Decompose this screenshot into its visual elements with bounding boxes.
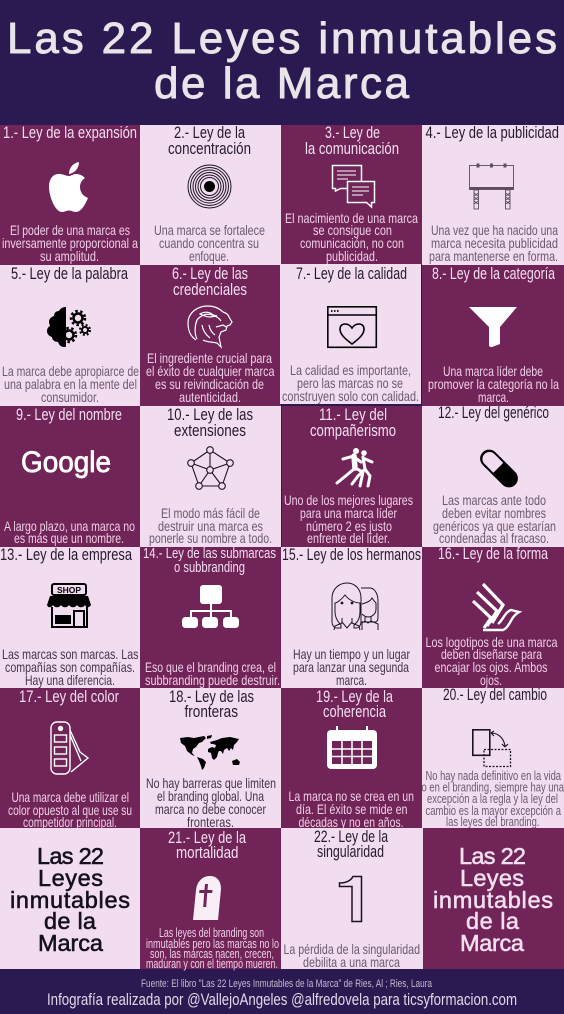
heading: law 22 (314, 828, 389, 861)
heading: law 10: 10.- Ley de las (167, 406, 253, 424)
heading: law 11 (310, 406, 396, 440)
text: law 9: es más que un nombre. (14, 530, 124, 546)
text: law 1 (2, 222, 138, 264)
text: repeated title dark: Las 22 (37, 843, 104, 869)
heading: law 11: 11.- Ley del (319, 406, 387, 424)
icon: apple (49, 162, 88, 212)
text: repeated title light: de la (466, 908, 520, 934)
heading: law 19: 19.- Ley de la (316, 688, 394, 706)
text: law 2: cuando concentra su (159, 235, 259, 251)
text: law 1: su amplitud. (40, 248, 99, 264)
text: repeated title light: Marca (460, 930, 525, 956)
heading: law 22: singularidad (317, 843, 384, 861)
panel: law 17 (0, 688, 140, 830)
icon: funnel (469, 307, 517, 347)
heading: law 11: compañerismo (310, 422, 396, 440)
text: law 11 (284, 492, 413, 546)
text: law 5 (2, 363, 139, 405)
text: repeated title dark: de la (44, 908, 97, 934)
text: law 10: ponerle su nombre a todo. (149, 530, 272, 546)
text: repeated title light: Leyes (460, 865, 524, 891)
text: law 1: inversamente proporcional a (2, 235, 138, 251)
panel: title repeat left (0, 828, 140, 969)
icon: pill (476, 446, 522, 491)
panel: law 2 (140, 124, 281, 265)
text: law 14: subbranding puede destruir. (145, 672, 280, 688)
text: repeated title dark: Leyes (38, 865, 103, 891)
icon: lion (188, 306, 232, 347)
text: law 12 (433, 492, 556, 546)
heading: law 3 (305, 124, 399, 158)
text: law 21: son, las marcas nacen, crecen, (150, 947, 274, 961)
heading: law 2: concentración (168, 140, 251, 158)
heading: law 17: 17.- Ley del color (19, 688, 119, 706)
panel: law 16 (422, 545, 564, 688)
heading: law 6 (172, 265, 248, 299)
text: law 2: enfoque. (189, 248, 229, 264)
panel: law 8 (422, 265, 564, 406)
panel: law 1 (0, 124, 140, 265)
text: law 10: destruir una marca es (158, 518, 263, 534)
text: law 7: La calidad es importante, (290, 362, 411, 378)
heading: law 21 (168, 829, 247, 862)
panel: law 19 (281, 688, 422, 830)
heading: law 14: o subbranding (174, 559, 245, 576)
panel: law 15 (281, 546, 422, 688)
heading: law 19: coherencia (323, 703, 387, 721)
text: law 3: comunicación, no con (300, 235, 404, 251)
heading: law 2 (168, 124, 251, 158)
heading: law 21: 21.- Ley de la (168, 829, 247, 847)
text: law 8 (428, 363, 559, 405)
text: law 15: marca. (336, 672, 367, 688)
text: law 22 (284, 941, 420, 970)
panel: law 22 (281, 828, 423, 970)
text: law 13: Hay una diferencia. (25, 672, 115, 688)
text: law 17: competidor principal. (23, 814, 117, 830)
heading: law 6: credenciales (173, 281, 247, 299)
text: law 21: maduran y con el tiempo mueren. (146, 957, 278, 971)
icon: runners (337, 448, 372, 486)
panel: law 6 (140, 265, 281, 406)
panel: law 4 (422, 124, 564, 265)
text: law 2: Una marca se fortalece (154, 222, 265, 238)
text: law 3: se consigue con (313, 222, 392, 238)
text: law 2 (154, 222, 265, 264)
text: law 18 (146, 775, 276, 830)
text: law 19 (288, 788, 414, 830)
text: repeated title light (433, 843, 553, 956)
text: law 6: es su reivindicación de (155, 376, 264, 392)
text: law 19: La marca no se crea en un (288, 788, 414, 804)
text: law 17 (8, 789, 132, 830)
text: law 3: El nacimiento de una marca (285, 210, 418, 226)
title: de la Marca (154, 59, 410, 108)
panel: law 3 (281, 124, 422, 264)
heading: law 15: 15.- Ley de los hermanos (282, 546, 421, 564)
text: law 22: debilita a una marca (303, 954, 400, 970)
text: law 18: el branding global. Una (157, 788, 264, 804)
icon: number one (340, 876, 362, 922)
text: law 9: A largo plazo, una marca no (4, 518, 135, 534)
panel: law 14 (140, 545, 281, 688)
text: repeated title light: Las 22 (459, 843, 526, 869)
text: law 15: Hay un tiempo y un lugar (293, 646, 410, 662)
text: law 17: color opuesto al que use su (8, 802, 132, 818)
text: law 20 (422, 769, 564, 829)
text: law 21: Las leyes del branding son (159, 926, 264, 940)
icon: siblings (332, 583, 378, 630)
text: repeated title light: inmutables (433, 887, 553, 913)
icon: org chart (182, 585, 239, 628)
text: law 19: décadas y no en años. (298, 814, 404, 830)
text: law 11: Uno de los mejores lugares (284, 492, 413, 508)
text: law 13: Las marcas son marcas. Las (2, 646, 138, 662)
heading: law 2: 2.- Ley de la (174, 124, 246, 142)
text: law 7 (282, 362, 419, 404)
icon: shop: SHOP (57, 586, 82, 595)
panel: law 13 (0, 546, 140, 688)
panel: law 9 (0, 406, 140, 547)
text: law 3 (285, 210, 418, 264)
heading: law 18: 18.- Ley de las (169, 688, 254, 706)
heading: law 5: 5.- Ley de la palabra (11, 265, 129, 283)
heading: law 22: 22.- Ley de la (314, 828, 389, 846)
icon: transform shape (473, 730, 510, 766)
panel: law 10 (140, 406, 281, 547)
icon: network (188, 447, 233, 489)
text: law 18: fronteras. (187, 814, 234, 830)
text: law 5: consumidor. (41, 389, 99, 405)
icon: tombstone (193, 876, 221, 920)
heading: law 6: 6.- Ley de las (172, 265, 248, 283)
text: law 15 (293, 646, 410, 688)
icon: brain with gears (47, 307, 90, 347)
heading: law 14: 14.- Ley de las submarcas (143, 545, 276, 562)
text: law 8: marca. (478, 389, 509, 405)
text: repeated title dark (10, 843, 130, 956)
text: law 18: No hay barreras que limiten (146, 775, 276, 791)
text: repeated title dark: Marca (38, 930, 104, 956)
panel: law 21 (140, 828, 281, 971)
text: law 19: día. El éxito se mide en (296, 801, 408, 817)
heading: law 3: la comunicación (305, 140, 399, 158)
text: law 13: compañías son compañías. (5, 659, 135, 675)
footer: source and credits: Fuente: El libro "Las 22 Leyes Inmutables de la Marca" de Ries, Al ; Ries, Laura (141, 978, 433, 990)
icon: chat bubbles (332, 166, 374, 207)
heading: law 7: 7.- Ley de la calidad (296, 265, 407, 283)
text: law 11: para una marca líder (300, 505, 397, 521)
heading: law 18 (169, 688, 254, 721)
text: law 5: una palabra en la mente del (4, 376, 137, 392)
heading: law 18: fronteras (184, 703, 238, 721)
heading: law 10 (167, 406, 253, 440)
text: law 6: autenticidad. (179, 389, 241, 405)
text: law 21: inmutables pero las marcas no lo (146, 937, 279, 951)
text: law 16 (426, 634, 558, 688)
heading: law 21: mortalidad (176, 844, 238, 862)
panel: law 11 (282, 406, 422, 547)
icon: shop (47, 584, 91, 627)
icon: target (188, 165, 231, 208)
text: law 14 (145, 659, 280, 688)
text: law 22: La pérdida de la singularidad (284, 941, 420, 957)
text: law 14: Eso que el branding crea, el (145, 659, 276, 675)
text: law 1: El poder de una marca es (10, 222, 130, 238)
heading: law 9: 9.- Ley del nombre (16, 406, 122, 424)
text: law 6: el éxito de cualquier marca (146, 363, 275, 379)
heading: law 13: 13.- Ley de la empresa (0, 546, 133, 564)
heading: law 3: 3.- Ley de (325, 124, 380, 142)
icon: world map (180, 735, 240, 770)
heading: law 10: extensiones (174, 422, 246, 440)
heading: law 14 (143, 545, 276, 576)
text: law 4 (429, 222, 558, 264)
panel: law 5 (0, 265, 140, 406)
text: law 3: publicidad. (326, 248, 378, 264)
text: law 7: pero las marcas no se (297, 375, 403, 391)
text: law 5: La marca debe apropiarce de (2, 363, 139, 379)
icon: bird logo (473, 584, 519, 630)
text: law 11: enfrente del líder. (307, 530, 390, 546)
panel: law 7 (280, 264, 421, 404)
text: law 11: número 2 es justo (306, 518, 392, 534)
text: law 9 (4, 518, 135, 546)
icon: billboard (470, 164, 514, 209)
title: Las 22 Leyes inmutables (7, 14, 557, 63)
text: repeated title dark: inmutables (10, 887, 130, 913)
heading: law 1: 1.- Ley de la expansión (3, 124, 137, 142)
icon: calendar (327, 726, 377, 769)
title (7, 14, 557, 108)
text: law 18: marca no debe conocer (155, 801, 266, 817)
icon: browser heart (328, 307, 376, 347)
footer: source and credits (47, 978, 517, 1009)
text: law 13 (2, 646, 138, 688)
text: law 15: para lanzar una segunda (293, 659, 409, 675)
panel: law 12 (422, 404, 564, 547)
text: law 21 (146, 926, 279, 971)
text: law 10: El modo más fácil de (161, 505, 260, 521)
text: law 6: El ingrediente crucial para (147, 350, 272, 366)
text: law 6 (146, 350, 275, 405)
text: law 17: Una marca debe utilizar el (12, 789, 129, 805)
text: law 10 (149, 505, 272, 546)
panel: law 20 (422, 686, 564, 829)
text: law 7: construyen solo con calidad. (282, 388, 419, 404)
heading: law 19 (316, 688, 394, 721)
icon: colour swatches (51, 722, 88, 774)
panel: title repeat right (423, 828, 564, 969)
logo: Google: Google (21, 446, 111, 479)
text: law 16: ojos. (480, 672, 502, 688)
panel: law 18 (140, 688, 281, 830)
